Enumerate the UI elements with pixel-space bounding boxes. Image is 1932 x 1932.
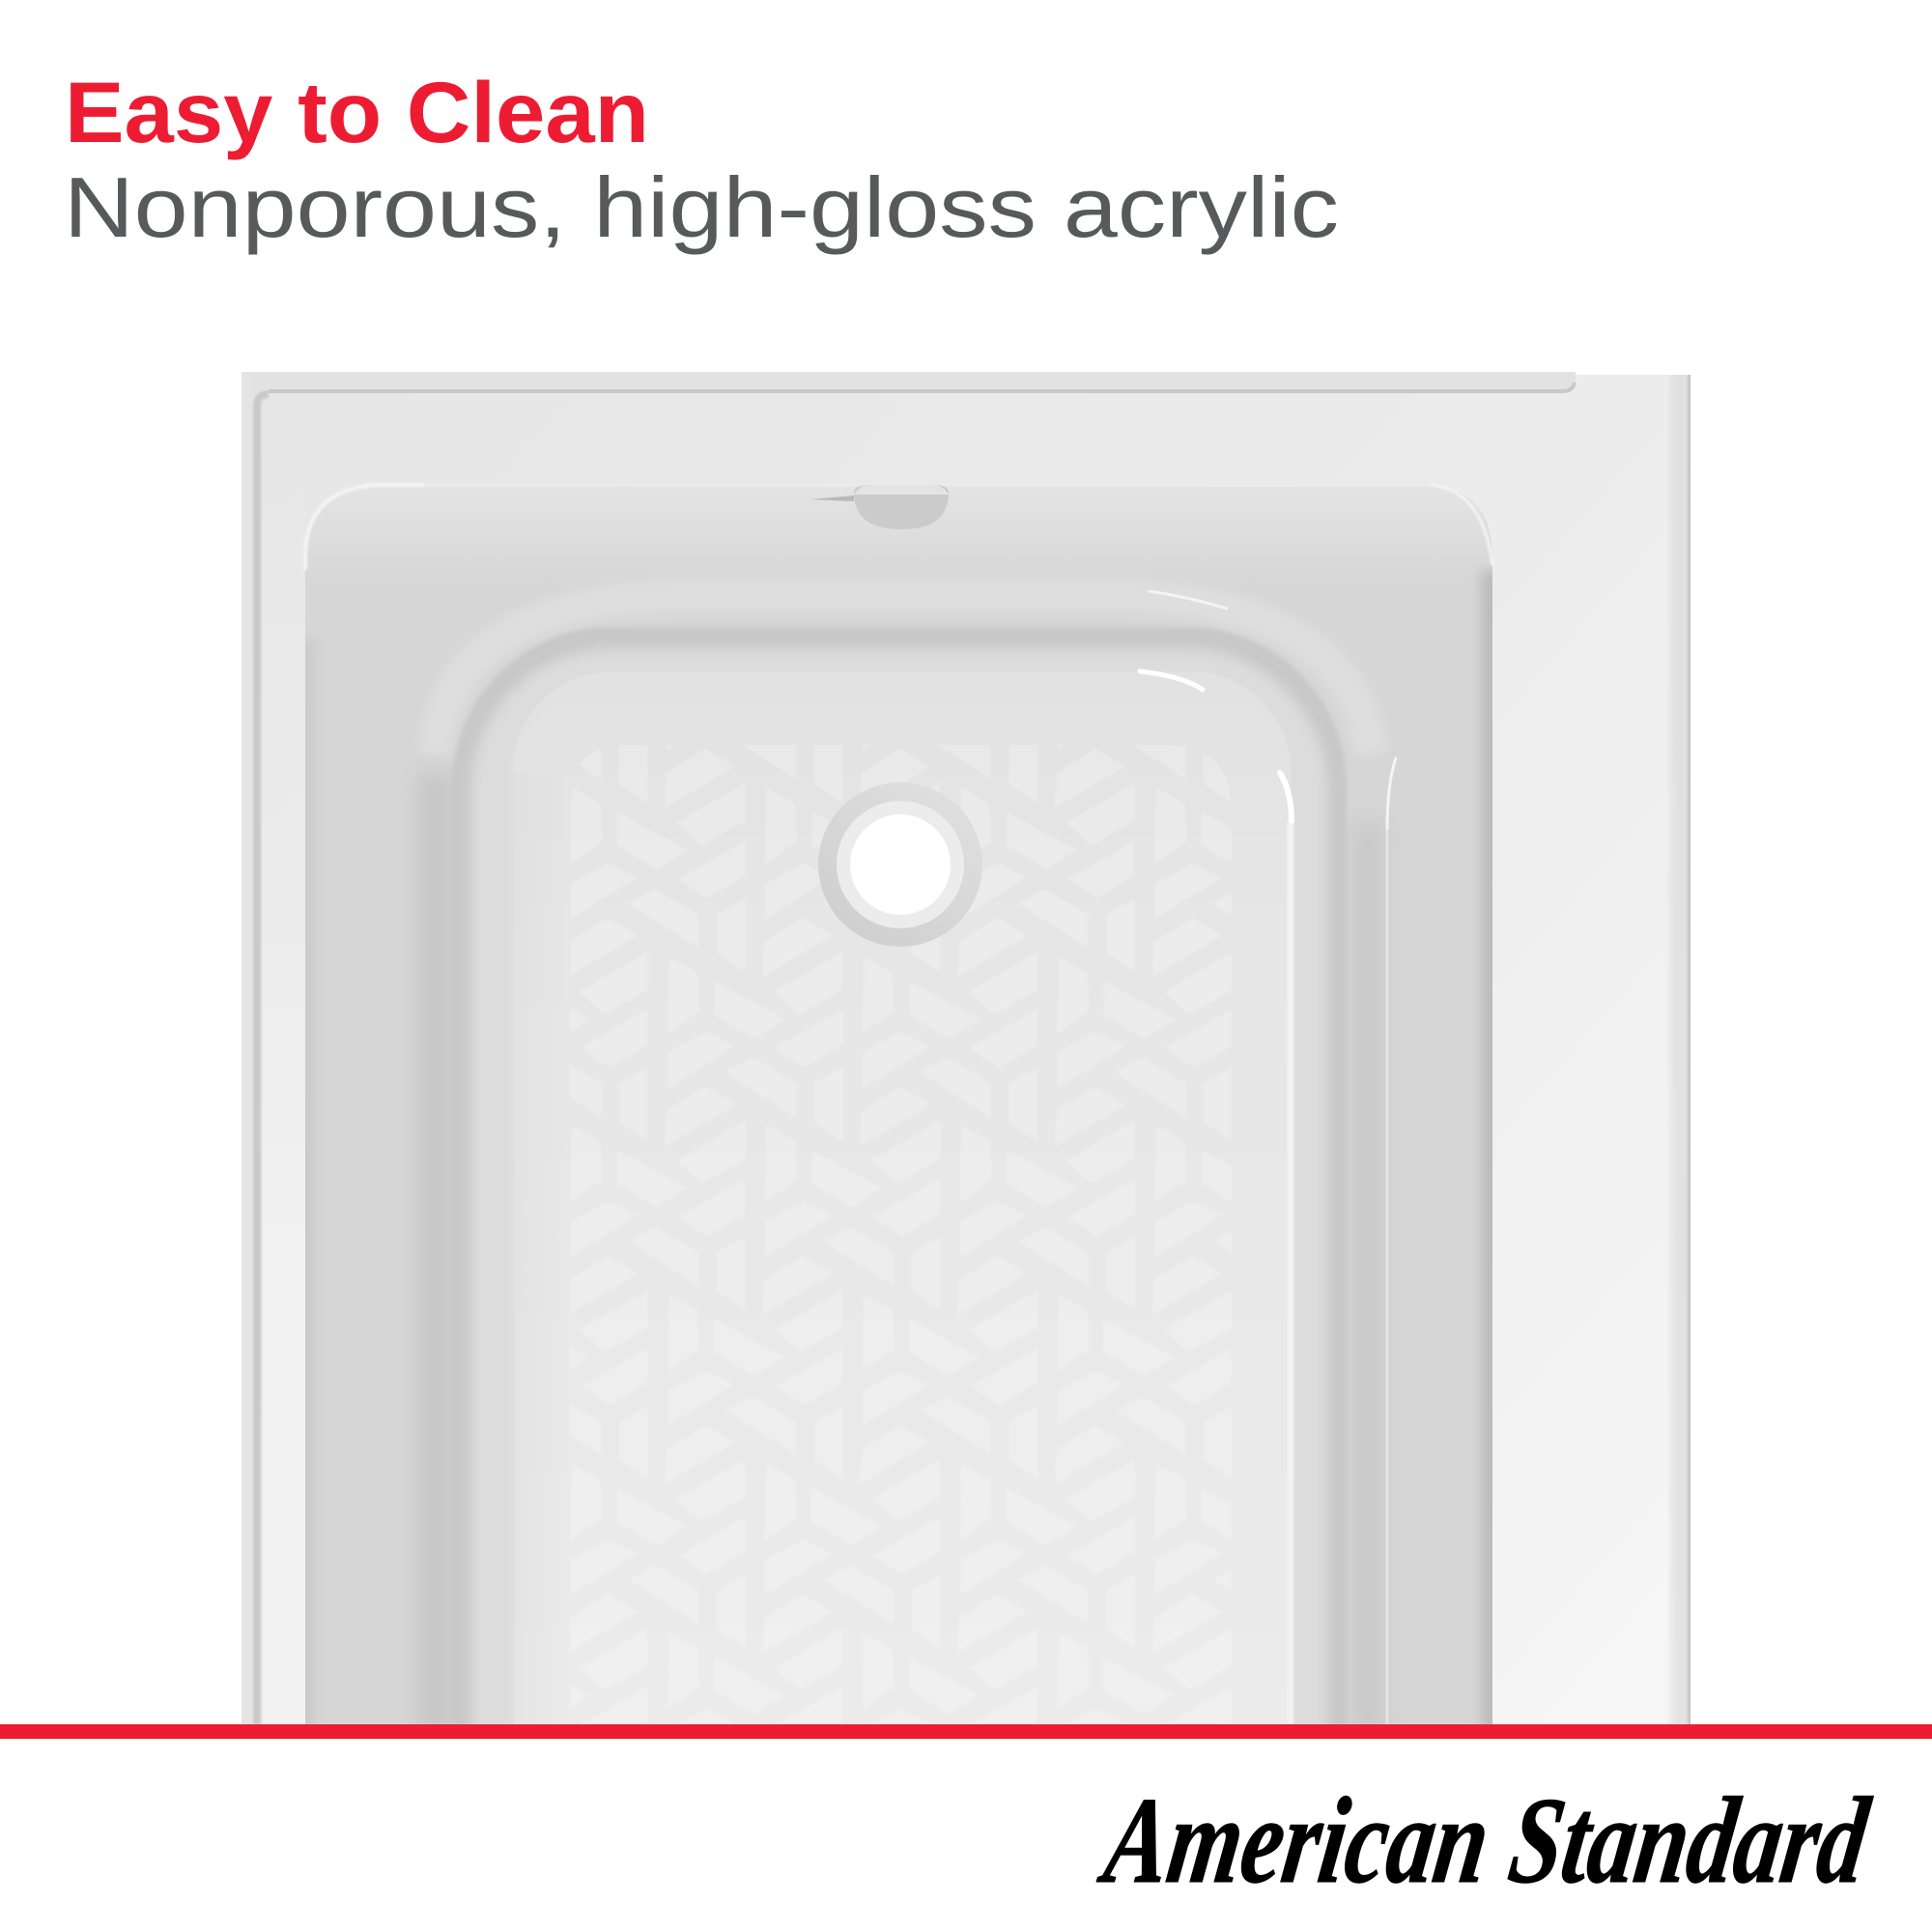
step surface [470, 648, 1328, 1724]
dark step edge [454, 627, 1347, 1724]
product photo: bathtub seen from above [242, 372, 1690, 1724]
overflow drain [810, 485, 949, 529]
basin [303, 483, 1492, 1724]
title: Easy to Clean: Easy to Clean [65, 64, 649, 160]
upper ridge of the step [435, 596, 1372, 753]
tub floor [516, 819, 1294, 1724]
gloss highlights [1140, 591, 1396, 1724]
red divider bar [0, 1724, 1932, 1739]
rim channel along the top edge [269, 372, 1577, 393]
floor drain [818, 782, 982, 947]
tub deck [242, 372, 1690, 1724]
basin rim highlight [305, 485, 425, 570]
slip-resistant geometric floor pattern [375, 580, 1330, 1932]
subtitle: Nonporous, high-gloss acrylic: Nonporous, high-gloss acrylic [64, 159, 1339, 255]
